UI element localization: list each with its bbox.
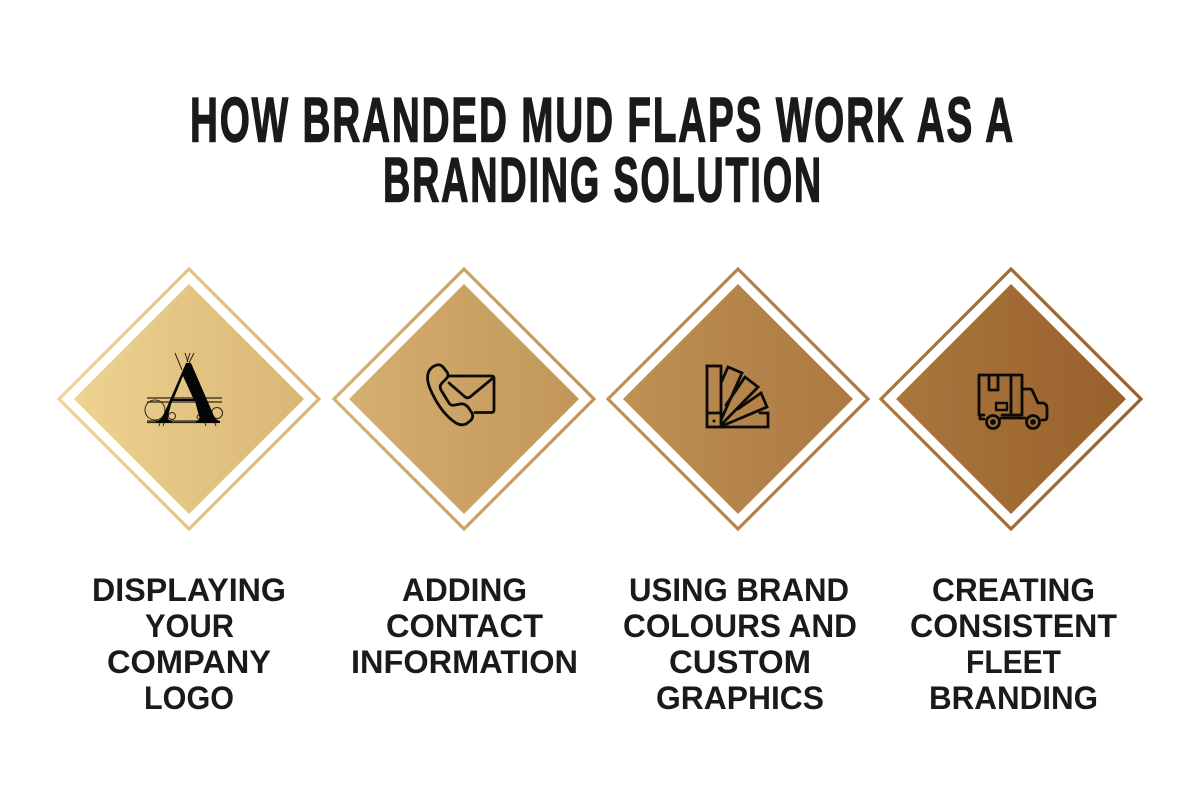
label 2: INFORMATION <box>351 644 578 680</box>
label 1: DISPLAYING <box>92 572 286 608</box>
diamond 3 <box>608 269 868 529</box>
label 4: CONSISTENT <box>910 608 1117 644</box>
icon: phone and envelope <box>428 365 494 425</box>
icon: letter A logo <box>145 353 222 426</box>
title <box>190 86 1015 216</box>
label 1 <box>92 572 286 716</box>
icon: colour swatch fan <box>707 366 768 427</box>
label 4: BRANDING <box>929 680 1098 716</box>
panel: displaying your company logo <box>59 269 319 716</box>
label 3: COLOURS AND <box>623 608 857 644</box>
label 2: ADDING <box>402 572 527 608</box>
diamond 4 <box>881 269 1141 529</box>
label 3: USING BRAND <box>629 572 849 608</box>
label 4: FLEET <box>966 644 1061 680</box>
label 2: CONTACT <box>386 608 543 644</box>
label 4: CREATING <box>932 572 1095 608</box>
label 4 <box>910 572 1117 716</box>
label 1: LOGO <box>144 680 234 716</box>
diamond 1 <box>59 269 319 529</box>
panel: using brand colours and custom graphics <box>608 269 868 716</box>
icon: delivery truck with box <box>979 375 1047 428</box>
title: BRANDING SOLUTION <box>383 146 823 216</box>
label 3: GRAPHICS <box>656 680 824 716</box>
label 1: COMPANY <box>107 644 271 680</box>
panel: adding contact information <box>334 269 594 680</box>
label 2 <box>351 572 578 680</box>
panel: creating consistent fleet branding <box>881 269 1141 716</box>
diamond 2 <box>334 269 594 529</box>
label 1: YOUR <box>145 608 234 644</box>
label 3: CUSTOM <box>669 644 811 680</box>
label 3 <box>623 572 857 716</box>
